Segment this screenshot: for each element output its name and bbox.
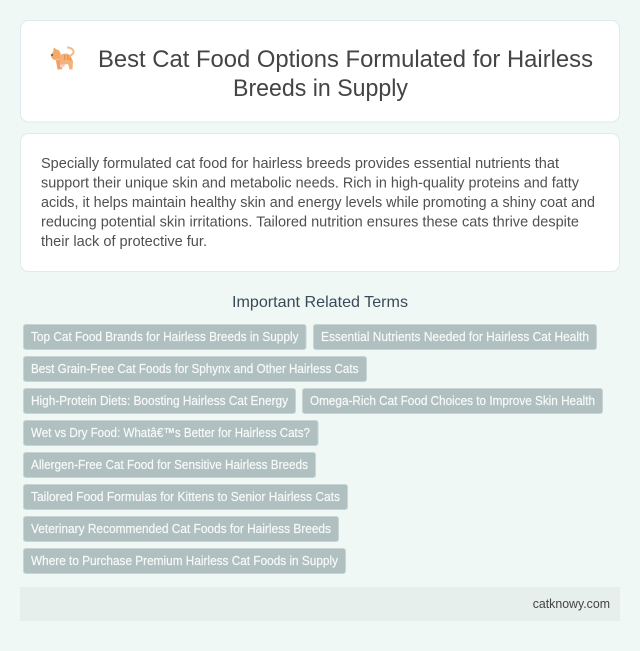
tag 9 [24, 516, 338, 542]
related term tags [24, 324, 602, 574]
tag 3 [24, 356, 366, 382]
tag 8: Tailored Food Formulas for Kittens to Senior Hairless Cats [31, 489, 340, 504]
tag 1: Top Cat Food Brands for Hairless Breeds in Supply [31, 329, 299, 344]
footer source text: catknowy.com [533, 597, 610, 611]
tag 6 [24, 420, 318, 446]
heading: important related terms: Important Related Terms [232, 294, 408, 311]
header panel [20, 20, 620, 122]
tag 5: Omega-Rich Cat Food Choices to Improve Skin Health [310, 393, 595, 408]
description panel [20, 134, 620, 272]
tag 1 [24, 324, 306, 350]
description text [41, 156, 595, 250]
footer bar [20, 587, 620, 621]
icon: orange cat [51, 48, 74, 70]
tag 2: Essential Nutrients Needed for Hairless Cat Health [321, 329, 589, 344]
description text: support their unique skin and metabolic needs. Rich in high-quality proteins and fatty [41, 176, 580, 192]
tag 10: Where to Purchase Premium Hairless Cat Foods in Supply [31, 553, 338, 568]
tag 6: Wet vs Dry Food: Whatâ€™s Better for Hairless Cats? [31, 425, 310, 440]
title: Best Cat Food Options Formulated for Hairless [98, 46, 593, 73]
tag 9: Veterinary Recommended Cat Foods for Hairless Breeds [31, 521, 331, 536]
tag 5 [302, 388, 602, 414]
description text: reducing potential skin irritations. Tailored nutrition ensures these cats thrive despite [41, 214, 579, 230]
tag 7 [24, 452, 316, 478]
description text: their lack of protective fur. [41, 234, 207, 250]
title: Breeds in Supply [233, 75, 408, 102]
tag 8 [24, 484, 348, 510]
tag 4: High-Protein Diets: Boosting Hairless Cat Energy [31, 393, 288, 408]
tag 3: Best Grain-Free Cat Foods for Sphynx and Other Hairless Cats [31, 361, 359, 376]
tag 2 [314, 324, 596, 350]
tag 10 [24, 548, 346, 574]
tag 4 [24, 388, 296, 414]
tag 7: Allergen-Free Cat Food for Sensitive Hairless Breeds [31, 457, 308, 472]
description text: Specially formulated cat food for hairless breeds provides essential nutrients that [41, 156, 559, 172]
title [98, 46, 593, 102]
description text: acids, it helps maintain healthy skin and energy levels while promoting a shiny coat and [41, 195, 595, 211]
